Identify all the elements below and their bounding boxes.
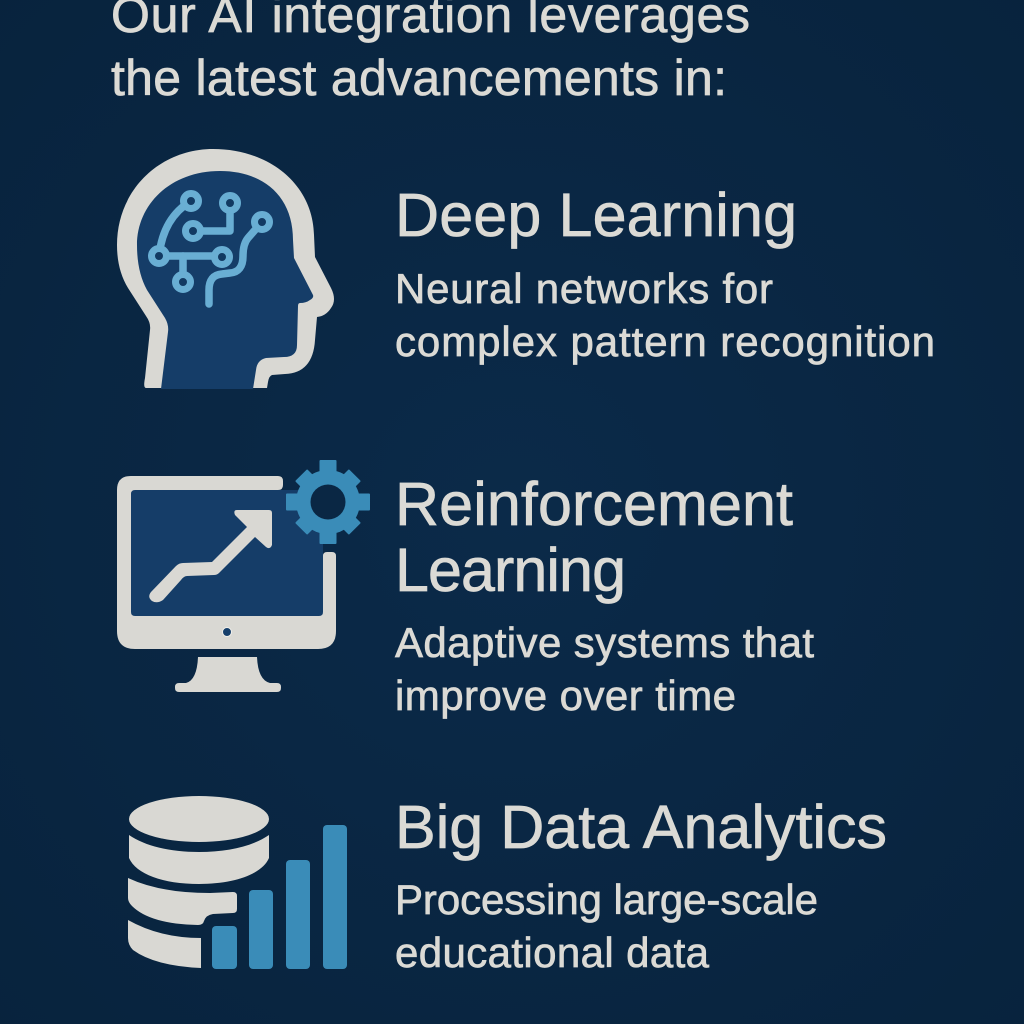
power dot [222, 628, 232, 636]
screen [125, 490, 323, 620]
gear [286, 460, 370, 544]
heading: Deep Learning: Deep Learning [395, 181, 797, 249]
icon: monitor with chart and gear [117, 460, 370, 692]
title: the latest advancements in: [111, 50, 727, 106]
text: Big Data Analytics description: Processing large-scale [395, 876, 818, 923]
text: Deep Learning description: complex pattern recognition [395, 318, 935, 365]
text: Deep Learning description: Neural networks for [395, 265, 773, 312]
bar chart [212, 825, 347, 969]
heading: Big Data Analytics: Big Data Analytics [395, 793, 887, 861]
text: Reinforcement Learning description: Adaptive systems that [395, 619, 814, 666]
heading: Reinforcement Learning: Reinforcement [395, 470, 793, 538]
stand [175, 657, 281, 692]
heading: Reinforcement Learning: Learning [395, 536, 626, 604]
rising arrow [149, 510, 272, 602]
text: Deep Learning description [395, 265, 935, 365]
icon: head with circuit brain [117, 149, 334, 389]
text: Reinforcement Learning description: improve over time [395, 672, 736, 719]
text: Big Data Analytics description [395, 876, 818, 976]
text: Reinforcement Learning description [395, 619, 814, 719]
text: Big Data Analytics description: educational data [395, 929, 710, 976]
icon: database with bar chart [128, 796, 347, 969]
heading: Reinforcement Learning [395, 470, 793, 604]
monitor frame [117, 476, 336, 649]
title [111, 0, 750, 106]
circuit nodes [152, 194, 270, 290]
circuit traces [159, 201, 262, 304]
database [128, 796, 269, 968]
